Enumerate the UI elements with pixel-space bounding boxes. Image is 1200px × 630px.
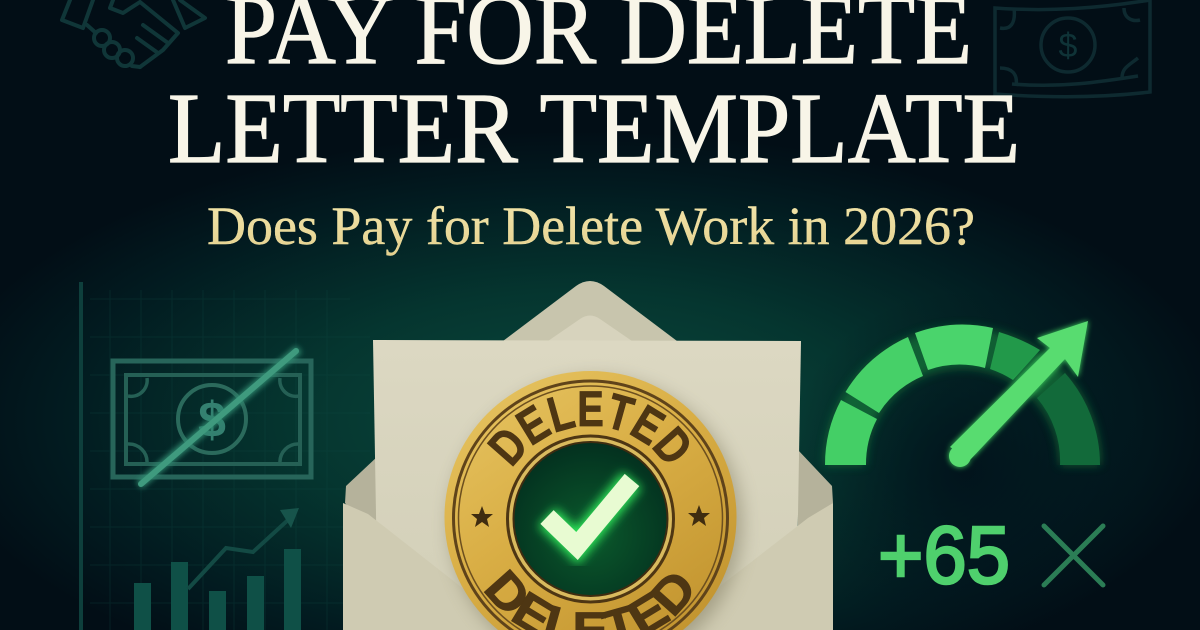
speedometer gauge (824, 321, 1100, 467)
center ring (508, 436, 674, 602)
score change +65: +65 (878, 510, 1010, 601)
seal text top: DELETED (486, 391, 689, 467)
envelope inner flap (548, 316, 632, 341)
envelope back flap (503, 281, 677, 341)
icon: dollar bill top right (995, 0, 1150, 97)
background grid and axis (90, 290, 370, 630)
subtitle: Does Pay for Delete Work in 2026? (207, 196, 975, 256)
bar chart with rising arrow (134, 508, 301, 630)
icon: dollar bill top right: $ (1059, 27, 1078, 65)
star left (471, 506, 493, 527)
gauge needle arrow (949, 321, 1088, 467)
star right (688, 505, 710, 526)
bars (134, 549, 301, 630)
icon: crossed-out dollar bill (113, 349, 311, 485)
check mark (547, 480, 632, 546)
trend arrow (188, 508, 299, 589)
gauge segments (825, 325, 1100, 465)
envelope with letter (343, 281, 833, 630)
envelope back sides (345, 451, 833, 526)
letter paper (373, 340, 801, 589)
icon: X mark (1044, 526, 1103, 585)
envelope front (343, 503, 833, 630)
gold DELETED seal (442, 370, 750, 630)
title line 2: LETTER TEMPLATE (168, 72, 1020, 184)
gauge glow (824, 327, 1100, 465)
axis line (79, 282, 83, 630)
icon: handshake (62, 0, 205, 67)
title (168, 0, 1020, 184)
icon: crossed-out dollar bill: $ (198, 392, 226, 448)
